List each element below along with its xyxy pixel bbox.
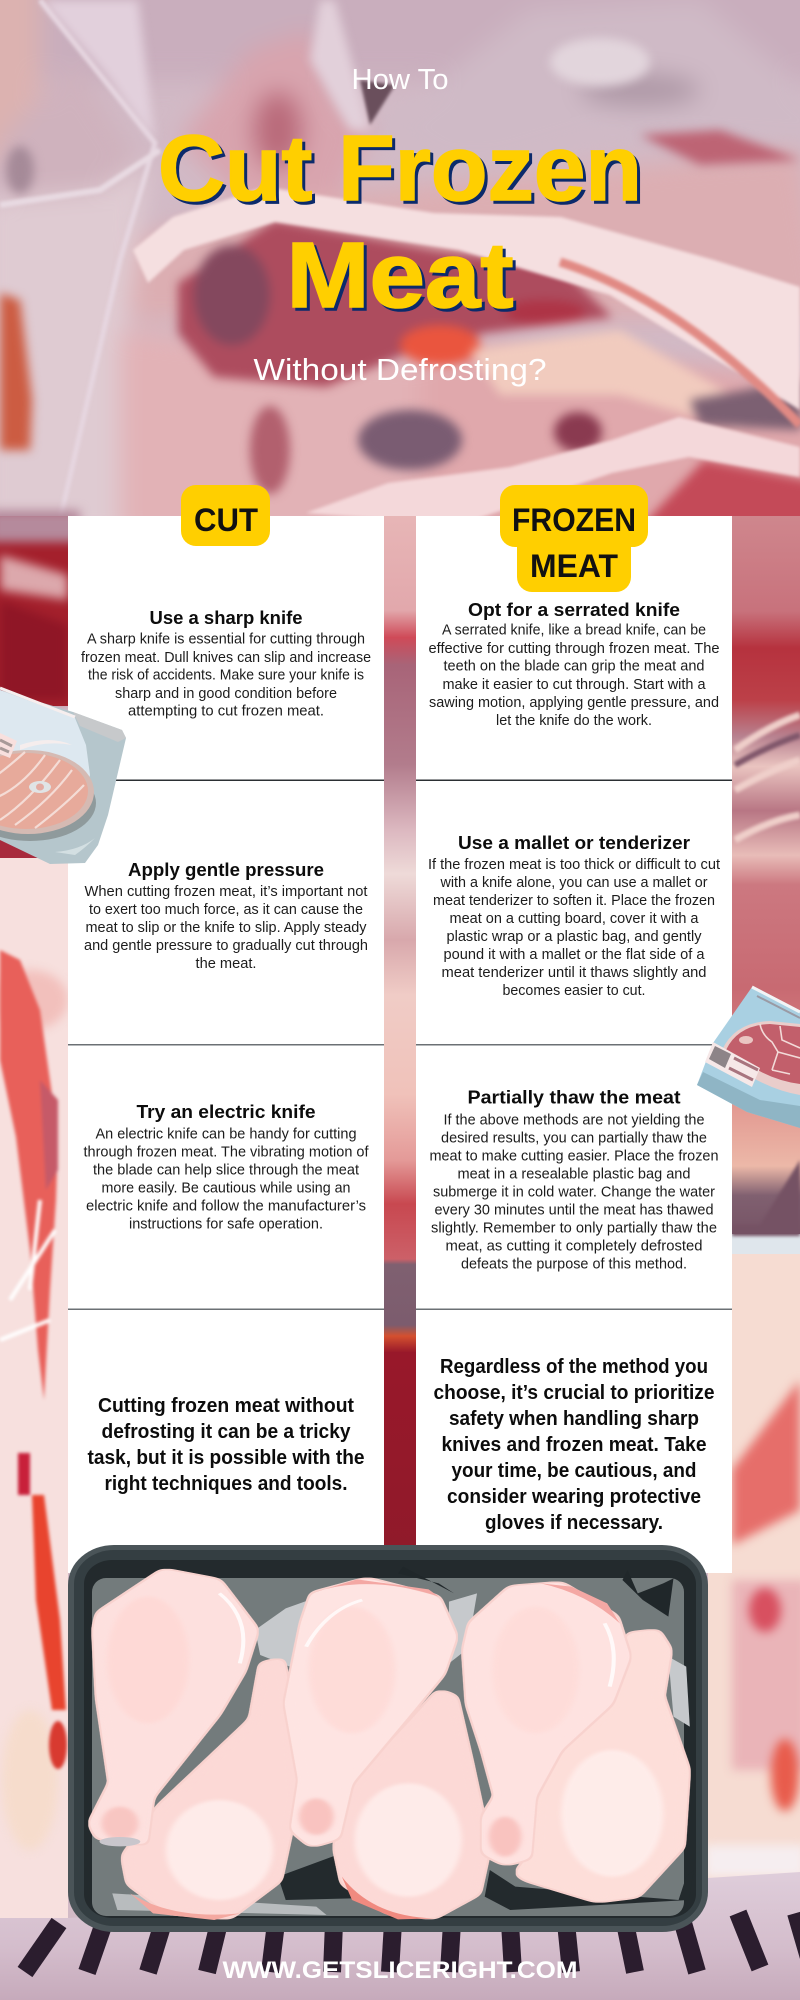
text block: How To: How To xyxy=(352,64,448,96)
tip: Use a sharp knife: Use a sharp knife xyxy=(150,607,302,628)
closing statement: right: consider wearing protective xyxy=(447,1485,701,1508)
closing statement: right: choose, it’s crucial to prioritize xyxy=(434,1381,714,1404)
tip: Partially thaw the meat: meat to make cutting easier. Place the frozen xyxy=(430,1147,718,1164)
left strip xyxy=(0,516,68,706)
tip: Apply gentle pressure xyxy=(84,859,368,972)
drumstick: upper middle xyxy=(285,1578,457,1847)
badge: FROZEN MEAT: MEAT xyxy=(530,548,618,584)
closing statement: right: gloves if necessary. xyxy=(485,1511,663,1534)
drumstick: upper right xyxy=(463,1583,630,1865)
tip: Use a mallet or tenderizer: becomes easier to cut. xyxy=(502,982,646,999)
tip: Opt for a serrated knife: sawing motion, applying gentle pressure, and xyxy=(429,694,719,711)
tip: Use a mallet or tenderizer: meat tenderizer to soften it. Place the frozen xyxy=(433,892,715,909)
right strip xyxy=(732,516,800,1240)
tip: Apply gentle pressure: to exert too much force, as it can cause the xyxy=(89,901,363,918)
tip: Partially thaw the meat: If the above methods are not yielding the xyxy=(444,1111,704,1128)
tip: Apply gentle pressure: and gentle pressure to gradually cut through xyxy=(84,937,368,954)
tip: Try an electric knife: the blade can help slice through the meat xyxy=(93,1161,360,1178)
tip: Opt for a serrated knife: effective for cutting through frozen meat. The xyxy=(428,640,720,657)
tip: Opt for a serrated knife: teeth on the blade can grip the meat and xyxy=(444,658,704,675)
tip: Use a sharp knife: attempting to cut frozen meat. xyxy=(128,703,324,720)
tip: Use a mallet or tenderizer: Use a mallet or tenderizer xyxy=(458,832,690,853)
tip: Apply gentle pressure: meat to slip or the knife to slip. Apply steady xyxy=(86,919,367,936)
badge: CUT: CUT xyxy=(194,502,258,538)
footer: website: WWW.GETSLICERIGHT.COM xyxy=(222,1957,578,1984)
badge: CUT xyxy=(181,485,270,546)
grill slats xyxy=(25,1913,800,1972)
tip: Try an electric knife: Try an electric knife xyxy=(136,1101,316,1122)
tip: Partially thaw the meat: desired results, you can partially thaw the xyxy=(441,1129,707,1146)
panel: left column xyxy=(68,516,384,1573)
tip: Use a sharp knife xyxy=(81,607,371,720)
tip: Use a mallet or tenderizer: plastic wrap or a plastic bag, and gently xyxy=(446,928,702,945)
drumstick: lower right xyxy=(515,1630,689,1902)
panel: right column xyxy=(416,516,732,1573)
tip: Try an electric knife: instructions for safe operation. xyxy=(129,1215,323,1232)
icon: tray of chicken drumsticks xyxy=(68,1545,708,1932)
tip: Opt for a serrated knife: A serrated knife, like a bread knife, can be xyxy=(442,622,706,639)
tip: Partially thaw the meat: meat, as cutting it completely defrosted xyxy=(446,1237,702,1254)
tip: Use a sharp knife: A sharp knife is essential for cutting through xyxy=(87,631,365,648)
tip: Opt for a serrated knife: Opt for a serrated knife xyxy=(468,599,680,620)
closing statement: right: your time, be cautious, and xyxy=(452,1459,696,1482)
tip: Use a mallet or tenderizer: meat tenderizer until it thaws slightly and xyxy=(442,964,706,981)
closing statement: right: safety when handling sharp xyxy=(449,1407,699,1430)
tip: Use a mallet or tenderizer xyxy=(428,832,721,999)
tip: Try an electric knife: through frozen meat. The vibrating motion of xyxy=(84,1143,369,1160)
title xyxy=(158,116,642,327)
tip: Partially thaw the meat: slightly. Remember to only partially thaw the xyxy=(431,1219,717,1236)
tip: Use a mallet or tenderizer: If the frozen meat is too thick or difficult to cut xyxy=(428,856,721,873)
tip: Apply gentle pressure: the meat. xyxy=(196,955,256,972)
drumstick: lower left xyxy=(122,1658,298,1918)
closing statement: right: Regardless of the method you xyxy=(440,1355,708,1378)
tip: Opt for a serrated knife: make it easier to cut through. Start with a xyxy=(442,676,706,693)
closing statement: left: task, but it is possible with the xyxy=(88,1446,364,1469)
badge: FROZEN MEAT: FROZEN xyxy=(512,502,636,538)
title: Meat xyxy=(286,223,514,327)
tip: Use a mallet or tenderizer: pound it with a mallet or the flat side of a xyxy=(444,946,705,963)
tip: Apply gentle pressure: Apply gentle pressure xyxy=(128,859,324,880)
closing statement: right: knives and frozen meat. Take xyxy=(442,1433,706,1456)
icon: red meat package xyxy=(697,987,800,1128)
tip: Use a sharp knife: the risk of accidents. Make sure your knife is xyxy=(88,667,364,684)
tip: Opt for a serrated knife: let the knife do the work. xyxy=(496,712,652,729)
closing statement: left: Cutting frozen meat without xyxy=(98,1394,354,1417)
icon: salmon package xyxy=(0,688,126,864)
tip: Try an electric knife: An electric knife can be handy for cutting xyxy=(96,1125,356,1142)
tip: Use a mallet or tenderizer: with a knife alone, you can use a mallet or xyxy=(440,874,708,891)
tip: Apply gentle pressure: When cutting frozen meat, it’s important not xyxy=(84,883,368,900)
tip: Opt for a serrated knife xyxy=(428,599,720,729)
drumstick: lower middle xyxy=(334,1690,490,1918)
tip: Partially thaw the meat xyxy=(430,1087,718,1272)
tip: Partially thaw the meat: Partially thaw the meat xyxy=(468,1087,680,1108)
closing statement: left xyxy=(88,1394,364,1495)
tip: Partially thaw the meat: meat in a resealable plastic bag and xyxy=(458,1165,690,1182)
tip: Use a mallet or tenderizer: meat on a cutting board, cover it with a xyxy=(450,910,699,927)
badge: FROZEN MEAT xyxy=(500,485,648,592)
tip: Partially thaw the meat: defeats the purpose of this method. xyxy=(461,1255,687,1272)
tip: Partially thaw the meat: submerge it in cold water. Change the water xyxy=(433,1183,715,1200)
tip: Use a sharp knife: frozen meat. Dull knives can slip and increase xyxy=(81,649,371,666)
title: Cut Frozen xyxy=(158,116,642,220)
closing statement: left: right techniques and tools. xyxy=(104,1472,348,1495)
floor xyxy=(0,1872,800,2000)
tip: Use a sharp knife: sharp and in good condition before xyxy=(115,685,337,702)
tip: Partially thaw the meat: every 30 minutes until the meat has thawed xyxy=(434,1201,714,1218)
closing statement: left: defrosting it can be a tricky xyxy=(102,1420,351,1443)
tip: Try an electric knife xyxy=(84,1101,369,1232)
tip: Try an electric knife: more easily. Be cautious while using an xyxy=(102,1179,350,1196)
tip: Try an electric knife: electric knife and follow the manufacturer’s xyxy=(86,1197,366,1214)
text block: Without Defrosting?: Without Defrosting? xyxy=(254,352,546,387)
closing statement: right xyxy=(434,1355,714,1534)
drumstick: upper left xyxy=(89,1569,258,1846)
centre strip xyxy=(384,516,416,1600)
